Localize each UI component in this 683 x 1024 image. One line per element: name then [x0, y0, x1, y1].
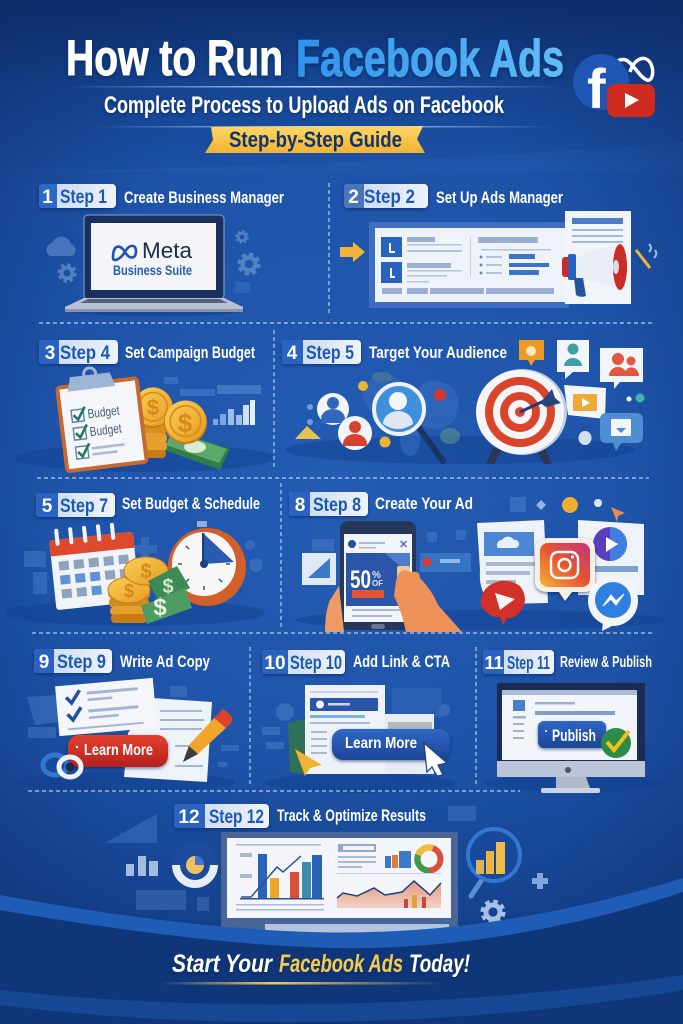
icon: coin stack: $	[178, 408, 193, 438]
icon: hands	[325, 566, 462, 632]
step badge 4: 4	[287, 343, 298, 364]
back document	[385, 714, 434, 774]
heading: Add Link & CTA	[353, 653, 450, 671]
vertical divider	[249, 647, 251, 785]
green folder	[288, 719, 305, 775]
panel: step 4 set campaign budget	[15, 340, 275, 474]
panel: step 7 set budget and schedule	[5, 493, 265, 626]
icon: coin stack: $	[147, 395, 159, 420]
icon: calendar	[48, 521, 140, 610]
document right with play	[578, 520, 644, 595]
icon: pie gauge	[172, 842, 218, 888]
small bar chart	[126, 856, 158, 876]
heading: Set Up Ads Manager	[436, 189, 563, 207]
panel: step 1	[39, 184, 284, 316]
icon: coins and cash: $	[153, 594, 167, 621]
bar chart	[240, 854, 324, 900]
icon: plus	[532, 873, 548, 889]
web page document	[305, 685, 385, 774]
button: learn more	[68, 735, 168, 767]
icon: laptop with meta business suite: Meta	[142, 238, 193, 263]
call to action: Start Your	[172, 950, 273, 978]
icon: link rings	[43, 755, 81, 777]
panel: step 8 create your ad	[289, 492, 665, 632]
button: learn more: Learn More	[345, 735, 417, 752]
icon: megaphone	[562, 244, 627, 297]
horizontal divider	[32, 632, 652, 634]
icon: clipboard checklist: Budget	[89, 420, 123, 439]
panel: step 2	[340, 184, 656, 308]
horizontal divider	[28, 790, 520, 792]
horizontal divider	[37, 477, 649, 479]
bubble: people	[600, 348, 643, 389]
button: learn more	[332, 729, 450, 760]
heading: Set Campaign Budget	[125, 344, 255, 362]
icon: instagram	[535, 538, 595, 601]
step badge 4	[282, 340, 361, 364]
step badge 9: Step 9	[57, 652, 106, 673]
ribbon: step-by-step guide: Step-by-Step Guide	[229, 127, 402, 152]
decorative shapes	[27, 686, 239, 767]
vertical divider	[328, 183, 330, 314]
step badge 8	[289, 492, 368, 516]
panel: step 9 write ad copy	[15, 649, 239, 792]
decorative shapes	[262, 688, 450, 749]
step badge 11	[483, 650, 554, 674]
decorative shapes	[105, 806, 476, 911]
analytics laptop	[221, 832, 458, 942]
icon: coins and cash: $	[140, 561, 152, 583]
step badge 3: 3	[45, 343, 55, 364]
icon: sparks	[636, 244, 656, 268]
step badge 5	[36, 493, 115, 517]
step badge 8: 8	[295, 495, 305, 516]
bubble: person	[557, 340, 589, 379]
icon: laptop with meta business suite: Business Suite	[113, 262, 192, 278]
icon: magnifier with bars	[468, 829, 520, 896]
chart card	[302, 553, 336, 585]
step badge 2: 2	[348, 187, 359, 208]
step badge 9	[34, 649, 112, 673]
title	[66, 30, 564, 88]
icon: clipboard checklist	[53, 362, 149, 474]
icon: smartphone with 50% off ad: ✕	[399, 539, 408, 551]
call to action: Today!	[409, 950, 470, 978]
step badge 10: Step 10	[290, 653, 342, 674]
panel: step 11 review and publish	[483, 650, 665, 793]
icon: target with arrow	[476, 369, 567, 464]
step badge 1	[39, 184, 116, 208]
avatar: red person	[338, 416, 372, 450]
icon: magnifier	[374, 384, 443, 461]
icon: facebook, meta, youtube	[573, 54, 655, 120]
decorative shapes	[24, 537, 263, 594]
step badge 12: Step 12	[209, 807, 264, 828]
icon: messenger	[588, 576, 638, 631]
header	[65, 30, 655, 153]
icon: white cursor	[424, 743, 447, 776]
pins	[295, 381, 446, 448]
icon: smartphone with 50% off ad: %	[372, 570, 381, 581]
step badge 9: 9	[39, 652, 49, 673]
icon: desktop monitor	[497, 683, 645, 793]
checklist note	[55, 678, 157, 736]
icon: laptop with meta business suite	[65, 215, 245, 316]
step badge 5: Step 7	[60, 496, 108, 517]
call to action: Facebook Ads	[279, 950, 403, 978]
icon: check badge	[601, 728, 631, 758]
heading: Create Your Ad	[375, 495, 473, 513]
bottom swoosh bands	[0, 878, 683, 1024]
world map	[363, 372, 460, 456]
step badge 1: 1	[42, 187, 53, 208]
icon: facebook, meta, youtube: f	[587, 57, 606, 120]
line and area chart	[337, 873, 442, 908]
document sheet	[565, 211, 631, 304]
decorative marks	[312, 497, 625, 551]
horizontal divider	[39, 322, 652, 324]
donut chart	[417, 847, 440, 871]
heading: Target Your Audience	[369, 344, 507, 362]
document back	[124, 698, 212, 782]
step badge 11: Step 11	[507, 653, 550, 673]
icon: smartphone with 50% off ad: 50	[350, 566, 371, 594]
tag strip	[420, 553, 471, 572]
icon: cash	[164, 430, 230, 470]
step badge 12: 12	[178, 807, 200, 828]
card: video	[564, 385, 606, 419]
heading: Write Ad Copy	[120, 653, 211, 671]
vertical divider	[475, 647, 477, 785]
title: Facebook Ads	[296, 30, 564, 88]
icon: clock	[168, 521, 246, 606]
step badge 3	[39, 340, 118, 364]
icon: coins and cash: $	[162, 576, 174, 598]
step badge 11: 11	[484, 653, 504, 673]
dots	[578, 394, 644, 445]
step badge 1: Step 1	[60, 187, 107, 208]
step badge 8: Step 8	[313, 495, 361, 516]
icon: yellow cursor	[295, 749, 322, 776]
icon: smartphone with 50% off ad	[340, 521, 416, 630]
icon: smartphone with 50% off ad: OF	[372, 579, 383, 588]
button: publish: Publish	[552, 726, 596, 745]
icon: coins and cash: $	[124, 581, 134, 601]
step badge 2: Step 2	[364, 187, 415, 208]
step badge 3: Step 4	[60, 343, 110, 364]
button: publish	[538, 721, 606, 748]
step badge 10	[262, 650, 345, 674]
panel: step 12 track and optimize	[105, 804, 548, 942]
vertical divider	[273, 330, 275, 468]
title: How to Run	[66, 30, 283, 86]
icon: coins and cash	[108, 557, 192, 624]
bubble: inbox	[600, 413, 643, 451]
icon: red video bubble	[481, 581, 525, 625]
icon: gear	[482, 901, 504, 923]
bar chart decoration	[164, 377, 261, 425]
panel: step 10 add link and cta	[262, 650, 455, 793]
underline	[159, 982, 444, 984]
icon: pencil	[183, 709, 232, 762]
vertical divider	[280, 483, 282, 628]
step badge 10: 10	[264, 653, 286, 674]
call to action	[159, 950, 470, 984]
heading: Track & Optimize Results	[277, 807, 426, 825]
ads manager dashboard	[369, 222, 569, 308]
avatar: blue person	[317, 393, 349, 425]
step badge 2	[344, 184, 428, 208]
icon: clipboard checklist: Budget	[87, 403, 121, 421]
heading: Set Budget & Schedule	[122, 495, 260, 513]
decorative side icons	[46, 231, 259, 293]
icon: coin stack	[133, 387, 207, 458]
panel: step 5 target your audience	[282, 340, 644, 464]
bubble: heart	[519, 340, 544, 366]
button: learn more: Learn More	[84, 742, 153, 759]
document left	[477, 520, 548, 604]
step badge 5: 5	[42, 496, 53, 517]
lines on back document	[160, 710, 204, 767]
icon: arrow	[340, 242, 365, 262]
step badge 4: Step 5	[306, 343, 354, 364]
subtitle: Complete Process to Upload Ads on Facebook	[104, 92, 504, 119]
step badge 12	[174, 804, 269, 828]
heading: Create Business Manager	[124, 189, 284, 207]
